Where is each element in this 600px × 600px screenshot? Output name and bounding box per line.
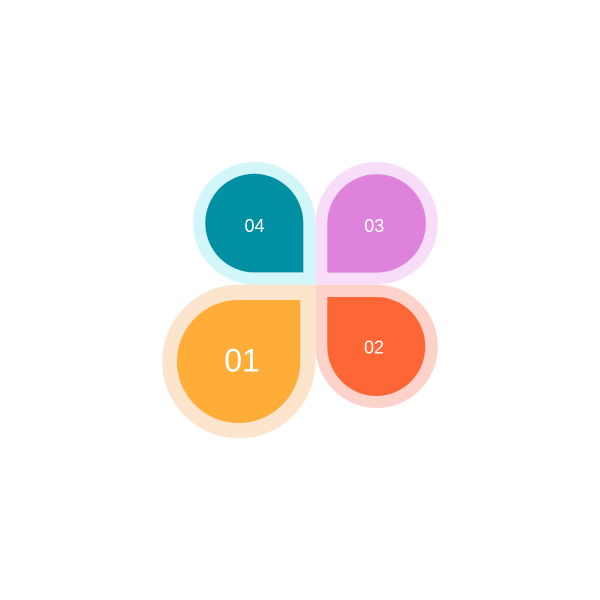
petal 02: red-orange, bottom right: 02: [364, 337, 384, 357]
petal 01: orange, bottom left: [162, 285, 316, 438]
petal 02: red-orange, bottom right: [316, 285, 438, 408]
petal 04: teal, top left: [193, 162, 316, 285]
petal 03: purple, top right: 03: [364, 216, 384, 236]
petal 04: teal, top left: 04: [244, 216, 265, 236]
petal 01: orange, bottom left: 01: [224, 343, 260, 379]
petal 03: purple, top right: [316, 162, 438, 285]
